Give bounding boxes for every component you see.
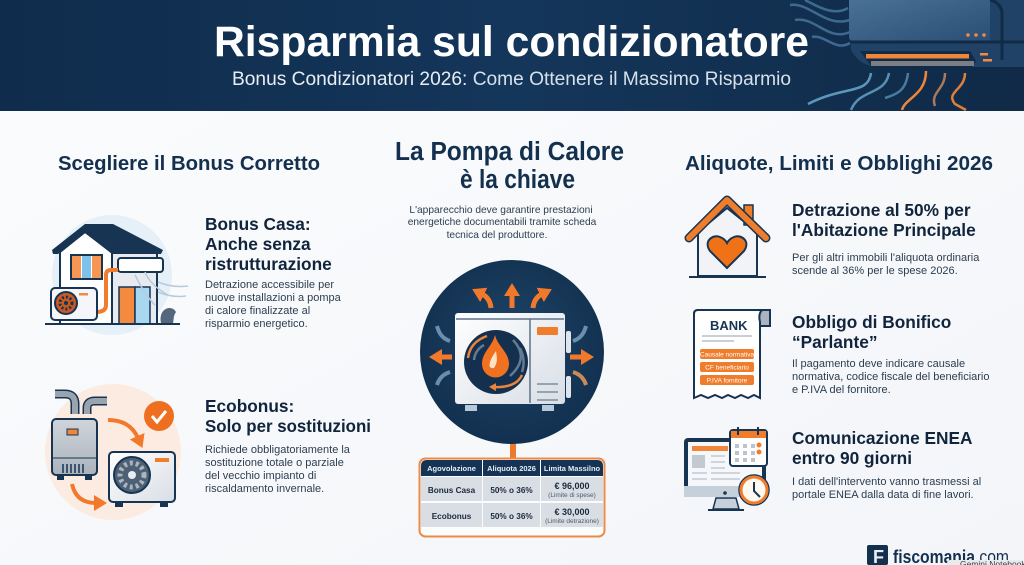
text: bonus casa: nuove installazioni a pompa: [205, 292, 342, 304]
text: bonifico: normativa, codice fiscale del beneficiario: [792, 371, 990, 383]
text: detrazione: scende al 36% per le spese 2026.: [792, 265, 958, 277]
text: bonus casa: ristrutturazione: [205, 254, 332, 274]
table: agevolazioni: Bonus Casa: [428, 486, 476, 495]
text: bonus casa: Detrazione accessibile per: [205, 279, 334, 291]
text: bonus casa: [205, 214, 342, 330]
heading: la pompa di calore: La Pompa di Calore: [395, 138, 624, 166]
icon: bank receipt: P.IVA fornitore: [707, 378, 748, 384]
text: ecobonus: del vecchio impianto di: [205, 470, 316, 482]
title: Risparmia sul condizionatore: [214, 18, 809, 66]
text: bonifico: Il pagamento deve indicare causale: [792, 358, 965, 370]
icon: air conditioner with airflow: [790, 0, 1024, 110]
heading: la pompa di calore: [395, 138, 624, 194]
text: intro: tecnica del produttore.: [447, 230, 547, 241]
header band: [0, 0, 1024, 111]
text: ecobonus: Richiede obbligatoriamente la: [205, 444, 351, 456]
text: intro: energetiche documentabili tramite scheda: [408, 217, 597, 228]
icon: heat pump circle: [420, 260, 604, 460]
text: detrazione: [792, 200, 980, 277]
icon: house with heat pump: [45, 215, 188, 335]
text: bonifico: “Parlante”: [792, 332, 877, 352]
text: enea: [792, 428, 981, 501]
subtitle: Bonus Condizionatori 2026: Come Ottenere il Massimo Risparmio: [232, 69, 791, 90]
icon: bank receipt: Causale normativa: [700, 352, 754, 358]
text: enea: portale ENEA dalla data di fine lavori.: [792, 489, 974, 501]
text: bonifico: [792, 312, 990, 396]
text: bonus casa: risparmio energetico.: [205, 318, 308, 330]
text: detrazione: Per gli altri immobili l'aliquota ordinaria: [792, 252, 980, 264]
text: enea: I dati dell'intervento vanno trasmessi al: [792, 476, 981, 488]
table: agevolazioni: Limita Massilno: [544, 464, 601, 473]
table: agevolazioni: (Limite detrazione): [545, 518, 599, 525]
text: bonus casa: Anche senza: [205, 234, 311, 254]
table: agevolazioni: € 30,000: [554, 507, 590, 517]
text: enea: Comunicazione ENEA: [792, 428, 973, 448]
table: agevolazioni: Aliquota 2026: [487, 464, 536, 473]
icon: boiler replaced by heat pump: [45, 384, 181, 520]
table: agevolazioni: 50% o 36%: [490, 512, 533, 521]
heading: aliquote limiti e obblighi: Aliquote, Limiti e Obblighi 2026: [685, 152, 993, 175]
table: agevolazioni: 50% o 36%: [490, 486, 533, 495]
icon: bank receipt: CF beneficiario: [705, 364, 749, 372]
panel: pompa di calore: [395, 138, 624, 536]
table: agevolazioni: Agovolazione: [427, 464, 476, 473]
table: agevolazioni: Ecobonus: [432, 512, 472, 521]
text: bonus casa: Bonus Casa:: [205, 214, 311, 234]
text: intro: [408, 205, 597, 241]
heading: la pompa di calore: è la chiave: [460, 166, 575, 194]
icon: bank receipt: [694, 310, 770, 398]
table: agevolazioni: [420, 458, 604, 536]
icon: house with heart: [689, 200, 766, 277]
icon: bank receipt: BANK: [710, 318, 748, 333]
panel: scegliere il bonus: [45, 152, 371, 520]
icon: monitor calendar clock: [684, 427, 769, 510]
text: ecobonus: [205, 396, 371, 495]
text: bonifico: Obbligo di Bonifico: [792, 312, 951, 332]
heading: scegliere il bonus corretto: Scegliere il Bonus Corretto: [58, 152, 320, 175]
text: ecobonus: sostituzione totale o parziale: [205, 457, 344, 469]
table: agevolazioni: (Limite di spese): [548, 492, 596, 499]
text: detrazione: Detrazione al 50% per: [792, 200, 971, 220]
text: enea: entro 90 giorni: [792, 448, 912, 468]
table: agevolazioni: € 96,000: [554, 481, 590, 491]
text: ecobonus: Solo per sostituzioni: [205, 416, 371, 436]
text: bonifico: e P.IVA del fornitore.: [792, 384, 891, 396]
panel: aliquote limiti obblighi: [684, 152, 993, 510]
text: detrazione: l'Abitazione Principale: [792, 220, 976, 240]
text: ecobonus: Ecobonus:: [205, 396, 294, 416]
text: ecobonus: riscaldamento invernale.: [205, 483, 324, 495]
text: bonus casa: di calore finalizzate al: [205, 305, 310, 317]
text: intro: L'apparecchio deve garantire prestazioni: [409, 205, 593, 216]
